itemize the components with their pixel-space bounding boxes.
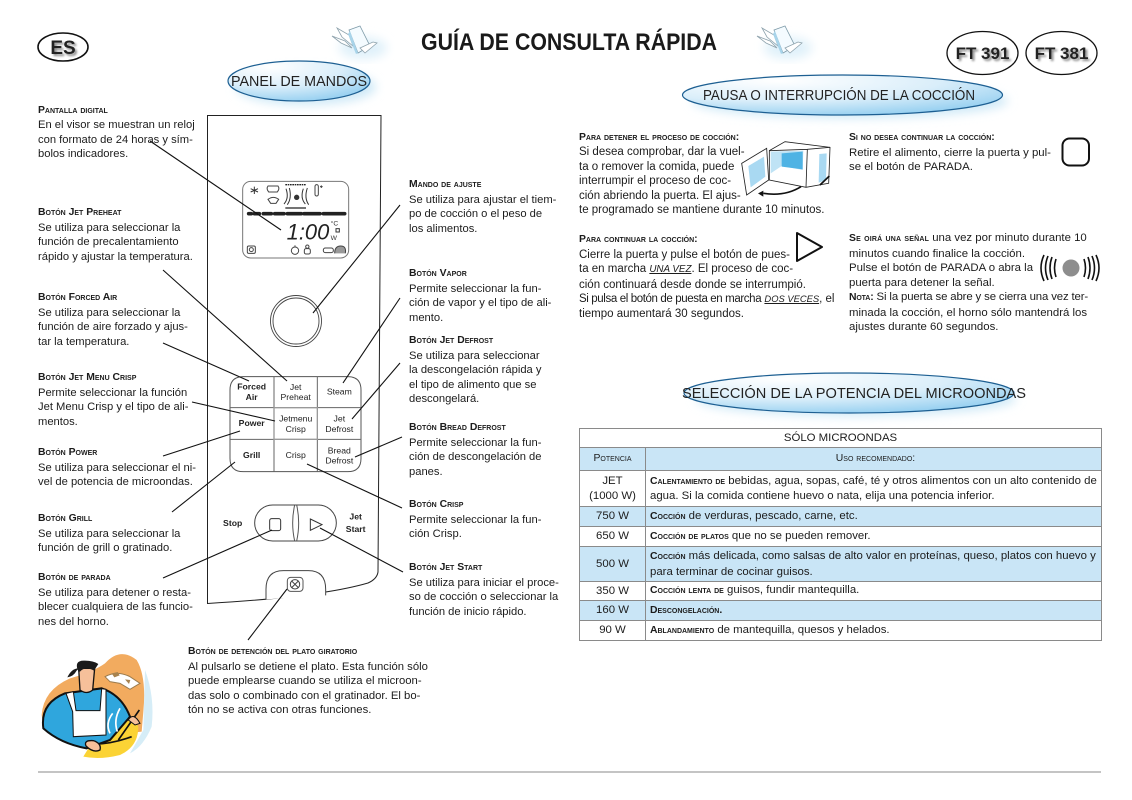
text: boton jet preheat: Botón Jet Preheat — [38, 207, 121, 218]
text: mando de ajuste: Mando de ajuste — [409, 179, 481, 190]
text: si no desea continuar: se el botón de PARADA. — [849, 161, 973, 173]
illustration: chef stirring a bowl — [42, 654, 152, 758]
table: seleccion de potencia: (1000 W) — [589, 490, 636, 502]
heading: panel de mandos: PANEL DE MANDOS — [231, 73, 367, 90]
text: boton jet preheat — [38, 207, 193, 262]
stop and start controls: Start — [346, 524, 366, 534]
text: boton crisp: Botón Crisp — [409, 499, 463, 510]
table: seleccion de potencia: Calentamiento de bebidas, agua, sopas, café, té y otros alimentos con un alto contenido de — [650, 474, 1097, 486]
text: pantalla digital: En el visor se muestran un reloj — [38, 119, 195, 131]
function buttons: Power — [239, 418, 265, 428]
text: boton vapor: mento. — [409, 312, 443, 324]
heading: seleccion de la potencia — [682, 372, 1026, 420]
text: para detener: Si desea comprobar, dar la vuel- — [579, 146, 745, 158]
function buttons: Preheat — [281, 392, 311, 402]
text: boton de parada: nes del horno. — [38, 616, 109, 628]
table: seleccion de potencia: 90 W — [599, 624, 626, 636]
icon: start triangle — [796, 232, 823, 262]
text: boton grill — [38, 513, 180, 554]
text: boton jet defrost: descongelará. — [409, 393, 479, 405]
text: boton jet menu crisp: mentos. — [38, 416, 78, 428]
badges: models FT 391 and FT 381: FT 381 — [1035, 44, 1088, 63]
text: para continuar: Si pulsa el botón de puesta en marcha DOS VECES, el — [579, 293, 834, 305]
leader lines — [150, 141, 403, 640]
text: senal acustica: minada la cocción, el horno sólo mantendrá los — [849, 306, 1087, 318]
text: si no desea continuar: Retire el alimento, cierre la puerta y pul- — [849, 146, 1051, 158]
text: boton jet preheat: Se utiliza para seleccionar la — [38, 222, 180, 234]
text: boton de detencion del plato giratorio: Al pulsarlo se detiene el plato. Esta función sólo — [188, 660, 428, 672]
text: boton de detencion del plato giratorio: puede emplearse cuando se utiliza el microon- — [188, 675, 422, 687]
text: pantalla digital: con formato de 24 horas y sím- — [38, 134, 193, 146]
text: boton jet defrost — [409, 335, 542, 405]
stop and start controls — [223, 505, 366, 541]
text: boton forced air: función de aire forzado y ajus- — [38, 321, 188, 333]
text: boton jet menu crisp — [38, 372, 188, 428]
text: boton jet start — [409, 562, 559, 618]
text: senal acustica: Se oirá una señal una vez por minuto durante 10 — [849, 232, 1087, 244]
function buttons: Jetmenu — [279, 414, 312, 424]
text: boton jet defrost: Se utiliza para seleccionar — [409, 350, 540, 362]
text: para detener — [579, 132, 824, 216]
table: seleccion de potencia: Uso recomendado: — [836, 453, 915, 464]
text: si no desea continuar: Si no desea continuar la cocción: — [849, 132, 995, 143]
text: para continuar: Para continuar la cocción: — [579, 234, 698, 245]
text: boton jet start: Botón Jet Start — [409, 562, 482, 573]
text: boton jet preheat: función de precalentamiento — [38, 236, 179, 248]
text: boton crisp — [409, 499, 541, 540]
function buttons: Grill — [243, 450, 260, 460]
text: para continuar — [579, 234, 834, 320]
text: boton power: Se utiliza para seleccionar el ni- — [38, 462, 196, 474]
text: senal acustica: minutos cuando finalice la cocción. — [849, 248, 1025, 260]
table: seleccion de potencia: Descongelación. — [650, 605, 722, 616]
text: boton power: vel de potencia de microondas. — [38, 476, 193, 488]
function buttons: Crisp — [286, 424, 306, 434]
text: para continuar: Cierre la puerta y pulse el botón de pues- — [579, 248, 790, 260]
function buttons — [230, 377, 361, 472]
text: boton jet start: función de inicio rápido. — [409, 606, 527, 618]
text: boton crisp: ción Crisp. — [409, 528, 462, 540]
text: mando de ajuste — [409, 179, 556, 234]
function buttons: Steam — [327, 387, 352, 397]
heading: panel de mandos — [227, 60, 379, 110]
text: boton jet menu crisp: Botón Jet Menu Crisp — [38, 372, 136, 383]
heading: pausa o interrupcion — [682, 74, 1010, 122]
text: boton de detencion del plato giratorio: das solo o combinado con el gratinador. El bo- — [188, 690, 420, 702]
text: senal acustica: ajustes durante 60 segundos. — [849, 321, 998, 333]
text: boton jet start: Se utiliza para iniciar el proce- — [409, 576, 559, 588]
text: pantalla digital: Pantalla digital — [38, 105, 108, 116]
text: pantalla digital — [38, 105, 195, 160]
badge: language ES: ES — [50, 38, 76, 59]
text: senal acustica: puerta para detener la señal. — [849, 276, 995, 288]
text: boton vapor: ción de vapor y el tipo de ali- — [409, 297, 551, 309]
text: boton bread defrost — [409, 422, 542, 478]
table: seleccion de potencia: para terminar de cocinar guisos. — [650, 566, 813, 578]
text: boton bread defrost: ción de descongelación de — [409, 451, 542, 463]
heading: seleccion de la potencia: SELECCIÓN DE LA POTENCIA DEL MICROONDAS — [682, 385, 1026, 402]
text: senal acustica — [849, 232, 1088, 333]
function buttons: Crisp — [286, 450, 306, 460]
text: boton vapor: Permite seleccionar la fun- — [409, 282, 541, 294]
adjustment knob — [270, 296, 322, 346]
text: para detener: ta o remover la comida, puede — [579, 160, 734, 172]
icon: stop square — [1062, 138, 1090, 166]
badges: models FT 391 and FT 381: FT 391 — [956, 44, 1009, 63]
table: seleccion de potencia: Cocción de verduras, pescado, carne, etc. — [650, 510, 858, 522]
table: seleccion de potencia: 750 W — [596, 510, 629, 522]
text: boton de detencion del plato giratorio — [188, 646, 428, 716]
function buttons: Jet — [290, 382, 302, 392]
text: mando de ajuste: po de cocción o el peso de — [409, 208, 542, 220]
function buttons: Air — [246, 392, 258, 402]
text: para detener: ción abriendo la puerta. El ajus- — [579, 190, 741, 202]
text: boton forced air: Botón Forced Air — [38, 292, 117, 303]
function buttons: Defrost — [325, 424, 354, 434]
function buttons: Bread — [328, 445, 351, 455]
stop and start controls: Jet — [349, 512, 362, 522]
icon: open microwave — [741, 141, 830, 197]
text: para continuar: ción continuará desde donde se interrumpió. — [579, 278, 806, 290]
table: seleccion de potencia: JET — [602, 475, 623, 487]
LCD display: 1:00 — [287, 219, 330, 244]
text: boton vapor: Botón Vapor — [409, 268, 467, 279]
text: para detener: te programado se mantiene durante 10 minutos. — [579, 204, 824, 216]
panel outline — [208, 116, 381, 604]
text: boton forced air: Se utiliza para seleccionar la — [38, 306, 180, 318]
table: seleccion de potencia: 160 W — [596, 604, 629, 616]
text: boton bread defrost: panes. — [409, 466, 443, 478]
text: si no desea continuar — [849, 132, 1051, 173]
control panel diagram — [150, 115, 404, 640]
text: boton jet defrost: Botón Jet Defrost — [409, 335, 493, 346]
text: boton jet menu crisp: Jet Menu Crisp y el tipo de ali- — [38, 401, 188, 413]
text: para detener: Para detener el proceso de cocción: — [579, 132, 739, 142]
text: boton de parada — [38, 572, 193, 628]
table: seleccion de potencia: Cocción más delicada, como salsas de alto valor en proteínas, queso, platos con huevo y — [650, 550, 1096, 562]
text: boton jet defrost: el tipo de alimento que se — [409, 378, 536, 390]
text: mando de ajuste: los alimentos. — [409, 222, 477, 234]
table: seleccion de potencia: 350 W — [596, 585, 629, 597]
table: seleccion de potencia: 500 W — [596, 558, 629, 570]
text: boton grill: Botón Grill — [38, 513, 92, 524]
text: boton crisp: Permite seleccionar la fun- — [409, 514, 541, 526]
table: seleccion de potencia: 650 W — [596, 530, 629, 542]
text: boton de parada: Botón de parada — [38, 572, 111, 583]
text: boton power: Botón Power — [38, 447, 97, 458]
text: boton bread defrost: Botón Bread Defrost — [409, 422, 506, 433]
text: boton jet defrost: la descongelación rápida y — [409, 364, 541, 376]
text: boton grill: Se utiliza para seleccionar la — [38, 528, 180, 540]
icon: sound signal — [1040, 254, 1100, 282]
stop and start controls: Stop — [223, 518, 242, 528]
function buttons: Jet — [334, 414, 346, 424]
text: boton de detencion del plato giratorio: Botón de detención del plato giratorio — [188, 646, 357, 657]
table: seleccion de potencia: SÓLO MICROONDAS — [784, 432, 897, 444]
text: boton jet preheat: rápido y ajustar la temperatura. — [38, 250, 193, 262]
text: mando de ajuste: Se utiliza para ajustar el tiem- — [409, 194, 556, 206]
LCD display: W — [331, 235, 338, 242]
text: boton power — [38, 447, 196, 488]
function buttons: Defrost — [325, 456, 354, 466]
LCD display: °C — [331, 219, 338, 227]
badge: language ES — [37, 32, 89, 62]
text: boton de parada: Se utiliza para detener o resta- — [38, 586, 191, 598]
table: seleccion de potencia — [579, 428, 1102, 641]
text: senal acustica: Nota: Si la puerta se abre y se cierra una vez ter- — [849, 291, 1088, 303]
text: boton grill: función de grill o gratinado. — [38, 542, 172, 554]
text: boton jet start: so de cocción o seleccionar la — [409, 591, 558, 603]
text: para detener: interrumpir el proceso de coc- — [579, 175, 731, 187]
LCD display — [243, 181, 349, 258]
text: boton vapor — [409, 268, 551, 324]
text: senal acustica: Pulse el botón de PARADA o abra la — [849, 262, 1033, 274]
text: boton forced air — [38, 292, 188, 348]
text: boton forced air: tar la temperatura. — [38, 336, 129, 348]
table: seleccion de potencia: Potencia — [593, 453, 632, 464]
table: seleccion de potencia: agua. Si la comida contiene huevo o nata, elija una potencia inferior. — [650, 490, 994, 502]
text: boton de parada: blecer cualquiera de las funcio- — [38, 601, 193, 613]
text: pantalla digital: bolos indicadores. — [38, 148, 128, 160]
turntable stop button — [266, 571, 326, 599]
icon: flying book left — [332, 26, 388, 62]
heading: pausa o interrupcion: PAUSA O INTERRUPCIÓN DE LA COCCIÓN — [703, 87, 975, 104]
table: seleccion de potencia: Ablandamiento de mantequilla, quesos y helados. — [650, 624, 890, 636]
text: boton jet menu crisp: Permite seleccionar la función — [38, 386, 187, 398]
badges: models FT 391 and FT 381 — [946, 30, 1098, 76]
table: seleccion de potencia: Cocción de platos que no se pueden remover. — [650, 530, 871, 542]
function buttons: Forced — [237, 381, 266, 391]
text: boton bread defrost: Permite seleccionar la fun- — [409, 436, 541, 448]
text: para continuar: tiempo aumentará 30 segundos. — [579, 308, 744, 320]
table: seleccion de potencia: Cocción lenta de guisos, fundir mantequilla. — [650, 584, 859, 596]
icon: flying book right — [756, 26, 813, 62]
text: para continuar: ta en marcha UNA VEZ. El proceso de coc- — [579, 263, 793, 275]
text: boton de detencion del plato giratorio: tón no se activa con otras funciones. — [188, 704, 371, 716]
